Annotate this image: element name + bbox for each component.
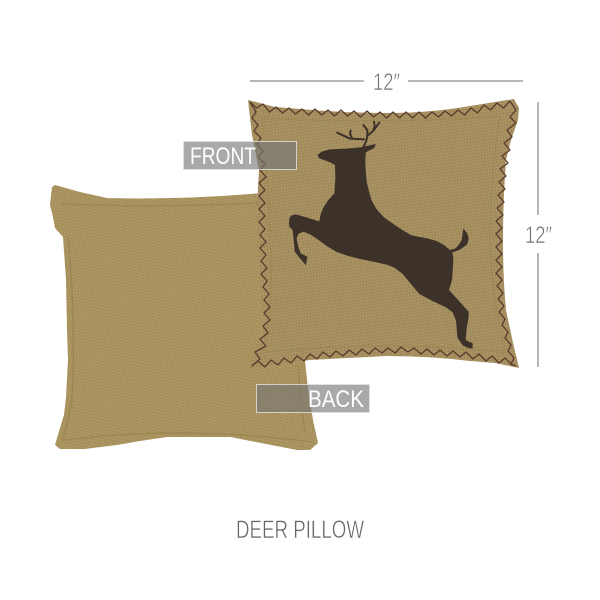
panel: back pillow — [50, 185, 318, 450]
icon: leaping deer silhouette — [289, 122, 473, 349]
height dimension: 12 inches: 12″ — [525, 222, 552, 249]
back pillow body — [50, 185, 318, 450]
callout: front label: FRONT — [190, 143, 256, 170]
panel: front pillow — [248, 99, 519, 369]
width dimension: 12 inches: 12″ — [373, 69, 400, 96]
callout: back label: BACK — [308, 386, 364, 413]
callout: front label — [184, 142, 296, 170]
back pillow seam — [60, 203, 312, 442]
callout: back label — [256, 384, 370, 413]
zigzag stitching — [250, 101, 516, 367]
front pillow body — [248, 99, 519, 369]
front pillow inner seam — [262, 116, 505, 352]
title: product name: DEER PILLOW — [236, 516, 364, 544]
